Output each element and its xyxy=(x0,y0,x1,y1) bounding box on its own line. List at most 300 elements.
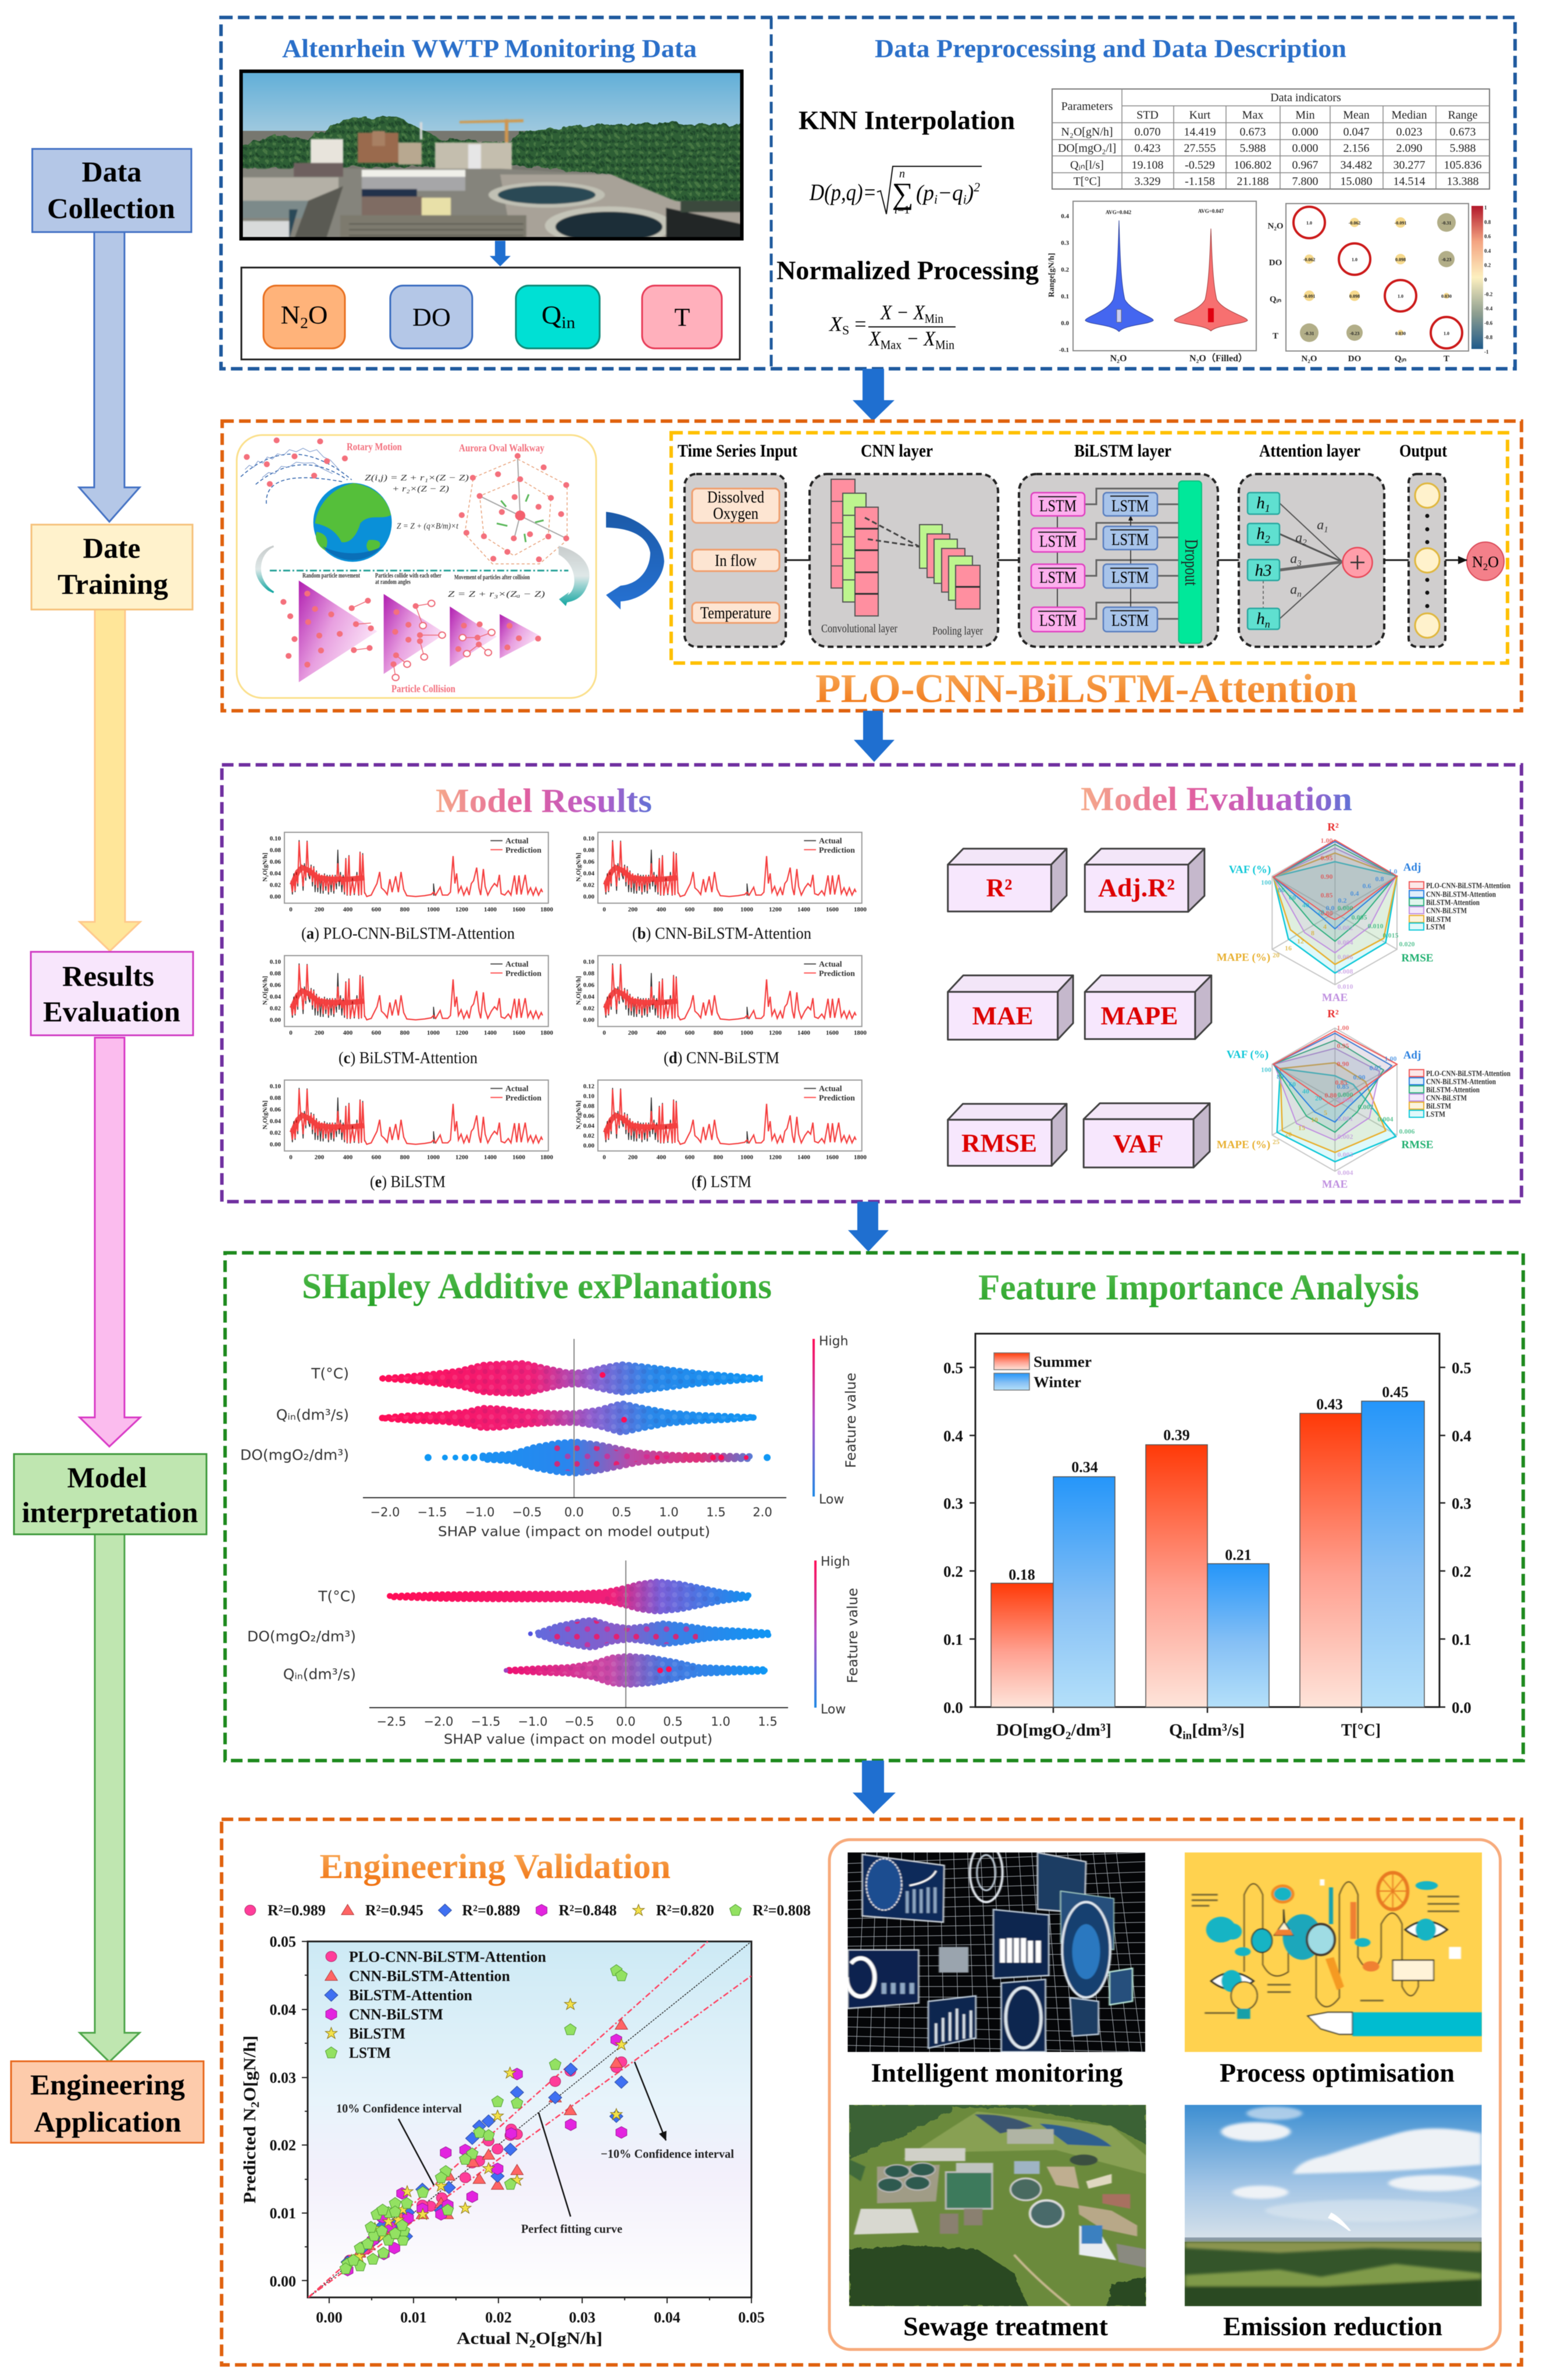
chart: PLO-CNN-BiLSTM-Attention: 0.02 xyxy=(270,882,281,889)
chart: CNN-BiLSTM-Attention: 1200 xyxy=(769,906,782,913)
chart: correlation heatmap: Qᵢₙ xyxy=(1270,295,1281,304)
panel: model interpretation xyxy=(225,1253,1523,1761)
chart: correlation heatmap: 0.8 xyxy=(1484,219,1491,225)
radar chart 2: 0.001 xyxy=(1338,1114,1353,1123)
formula: distance: n xyxy=(899,168,905,180)
SHAP chart: summer: 2.0 xyxy=(753,1505,772,1519)
chart: correlation heatmap: T xyxy=(1444,354,1449,364)
BiLSTM block: LSTM xyxy=(1039,497,1077,515)
table: data indicators: 2.156 xyxy=(1344,142,1369,155)
chart: BiLSTM: 1600 xyxy=(512,1154,526,1161)
chart: LSTM: 0.00 xyxy=(583,1142,594,1149)
formula: distance: ∑ xyxy=(892,177,914,211)
chart: correlation heatmap: 0.030 xyxy=(1441,294,1452,299)
attention block: h xyxy=(1256,610,1265,628)
x axis title: O[gN/h] xyxy=(536,2329,603,2348)
chart: LSTM: 0.04 xyxy=(583,1123,594,1130)
chart: correlation heatmap: -0.062 xyxy=(1349,220,1360,226)
labels of PLO diagram xyxy=(302,441,545,694)
annotations: Perfect fitting curve xyxy=(521,2222,622,2236)
table: data indicators: 105.836 xyxy=(1444,159,1482,172)
y axes labels: 0.3 xyxy=(943,1495,963,1512)
step: Results Evaluation: Results xyxy=(62,960,154,992)
swarm: Qin row xyxy=(509,1656,765,1685)
chart: BiLSTM: 1400 xyxy=(484,1154,497,1161)
formula: normalization: S xyxy=(842,323,849,337)
attention block: 3 xyxy=(1296,559,1302,568)
radar chart 1: R² xyxy=(1327,821,1339,833)
column headings: BiLSTM layer xyxy=(1074,440,1171,461)
step: Model interpretation xyxy=(14,1454,206,1534)
y axis title: O[gN/h] xyxy=(240,2036,259,2101)
radar chart 1: 0.000 xyxy=(1338,904,1353,912)
SHAP chart: summer: −0.5 xyxy=(512,1505,542,1519)
indicator: Qin xyxy=(516,286,600,348)
y axes labels xyxy=(943,1359,1471,1716)
output: N2O xyxy=(1467,542,1504,580)
radar chart 1: RMSE xyxy=(1402,952,1433,964)
axis tick labels xyxy=(270,1933,765,2326)
SHAP chart: summer: −1.0 xyxy=(465,1505,494,1519)
R-squared legend: R²=0.889 xyxy=(462,1902,520,1919)
formula: distance: i xyxy=(934,192,938,206)
formula: normalization: Min xyxy=(935,337,954,352)
radar chart 1: 0.005 xyxy=(1352,913,1367,921)
chart: CNN-BiLSTM: 600 xyxy=(685,1029,695,1036)
chart: violin plot: N₂O（Filled） xyxy=(1189,353,1248,364)
chart: correlation heatmap: -0.31 xyxy=(1442,220,1451,226)
chart: PLO-CNN-BiLSTM-Attention: 0.04 xyxy=(270,870,281,877)
chart: correlation heatmap: 0.6 xyxy=(1484,234,1491,240)
chart: PLO-CNN-BiLSTM-Attention: 1200 xyxy=(455,906,469,913)
caption a: (a) PLO-CNN-BiLSTM-Attention xyxy=(301,924,515,943)
SHAP chart: winter: −2.0 xyxy=(423,1715,454,1729)
step: Engineering Application: Engineering xyxy=(30,2068,185,2101)
caption c: (c) BiLSTM-Attention xyxy=(338,1049,477,1067)
y axes labels: 0.5 xyxy=(1452,1359,1471,1377)
image: sewage treatment xyxy=(849,2104,1147,2307)
step: Model interpretation: Model xyxy=(67,1461,147,1494)
icon: earth xyxy=(313,483,392,562)
chart: correlation heatmap: 0.098 xyxy=(1395,257,1406,262)
image: emission reduction xyxy=(1184,2104,1482,2307)
step: Date Training xyxy=(31,525,193,610)
chart: CNN-BiLSTM: 1200 xyxy=(769,1029,782,1036)
indicator: Qin: Q xyxy=(541,301,560,329)
indicator: N2O: N xyxy=(280,301,299,329)
radar chart 2: 0.95 xyxy=(1337,1042,1349,1050)
swarm dots xyxy=(387,1594,768,1673)
chart: violin plot: -0.1 xyxy=(1059,347,1069,354)
table: data indicators: 13.388 xyxy=(1447,175,1478,188)
chart: CNN-BiLSTM: 200 xyxy=(628,1029,638,1036)
indicator: T: T xyxy=(675,303,690,332)
chart: violin plot: Range[gN/h] xyxy=(1047,253,1056,297)
chart: CNN-BiLSTM-Attention: 800 xyxy=(714,906,724,913)
chart: PLO-CNN-BiLSTM-Attention: 800 xyxy=(400,906,410,913)
PLO optimiser diagram xyxy=(237,435,596,698)
application gallery xyxy=(829,1840,1501,2350)
radar chart 1: 0.85 xyxy=(1320,891,1333,899)
radar chart 1: 100 xyxy=(1261,878,1271,886)
chart: PLO-CNN-BiLSTM-Attention: 1000 xyxy=(427,906,440,913)
network box xyxy=(671,433,1508,663)
chart: correlation heatmap: T xyxy=(1273,332,1278,341)
category labels: [dm³/s] xyxy=(1192,1720,1245,1740)
table: data indicators: 0.023 xyxy=(1396,126,1423,138)
table: data indicators: 5.988 xyxy=(1240,142,1266,155)
table: data indicators: 14.514 xyxy=(1394,175,1425,188)
table: data indicators: 0.673 xyxy=(1240,126,1266,138)
R-squared legend: R²=0.808 xyxy=(753,1902,811,1919)
labels of PLO diagram: Z(i,j) = Z + r₁×(Z − Z) xyxy=(365,473,469,483)
panel: PLO-CNN-BiLSTM-Attention xyxy=(222,421,1521,711)
table: data indicators: Data indicators xyxy=(1270,91,1341,104)
scatter legend: CNN-BiLSTM xyxy=(349,2006,443,2023)
SHAP chart: winter xyxy=(247,1555,861,1747)
SHAP chart: summer xyxy=(240,1334,859,1540)
table: data indicators: 15.080 xyxy=(1340,175,1373,188)
chart: BiLSTM: Prediction xyxy=(505,1094,541,1103)
BiLSTM block xyxy=(1019,474,1218,647)
chart: CNN-BiLSTM-Attention: 600 xyxy=(685,906,695,913)
category labels xyxy=(996,1720,1381,1742)
radar chart 2: 40 xyxy=(1302,1087,1309,1095)
scatter legend: PLO-CNN-BiLSTM-Attention xyxy=(349,1948,547,1965)
radar chart 1: 4 xyxy=(1323,922,1327,931)
axis tick labels: 0.02 xyxy=(270,2137,296,2154)
table: data indicators: N₂O[gN/h] xyxy=(1061,126,1113,138)
axis tick labels: 0.01 xyxy=(400,2309,427,2326)
formula: normalization: X − X xyxy=(881,301,931,324)
BiLSTM block: LSTM xyxy=(1039,533,1077,551)
table: data indicators: 14.419 xyxy=(1184,126,1216,138)
table: data indicators: 30.277 xyxy=(1394,159,1425,172)
radar chart 2: 20 xyxy=(1285,1130,1292,1138)
formula: normalization: − X xyxy=(901,327,936,350)
caption b: (b) CNN-BiLSTM-Attention xyxy=(632,924,811,943)
chart: BiLSTM-Attention: 1200 xyxy=(455,1029,469,1036)
chart: LSTM: 1200 xyxy=(769,1154,782,1161)
radar chart 1: 16 xyxy=(1285,944,1292,952)
SHAP chart: summer: −2.0 xyxy=(370,1505,400,1519)
step: Engineering Application: Application xyxy=(34,2105,181,2138)
caption e: (e) BiLSTM xyxy=(370,1173,446,1191)
SHAP chart: summer: −1.5 xyxy=(418,1505,447,1519)
swarm: T row xyxy=(390,1581,749,1612)
SHAP chart: winter: −2.5 xyxy=(377,1715,406,1729)
chart: LSTM: Prediction xyxy=(819,1094,855,1103)
SHAP chart: winter: 1.0 xyxy=(711,1715,730,1729)
table: data indicators: Kurt xyxy=(1189,109,1211,122)
radar chart 1: 0.010 xyxy=(1368,922,1383,930)
table: data indicators: DO[mgO₂/l] xyxy=(1058,142,1116,155)
radar chart 2: 25 xyxy=(1273,1138,1280,1146)
heading: monitoring data: Altenrhein WWTP Monitoring Data xyxy=(282,34,697,63)
chart: correlation heatmap: -0.2 xyxy=(1484,291,1493,297)
chart: LSTM: 0.06 xyxy=(583,1113,594,1120)
chart: PLO-CNN-BiLSTM-Attention: 400 xyxy=(343,906,353,913)
step: Data Collection: Collection xyxy=(47,192,175,225)
R-squared legend: R²=0.820 xyxy=(656,1902,714,1919)
step: Results Evaluation: Evaluation xyxy=(43,995,180,1028)
radar chart 1: 0.010 xyxy=(1338,982,1353,991)
chart: CNN-BiLSTM-Attention: 0 xyxy=(603,906,606,913)
panel: data collection and preprocessing xyxy=(221,17,1515,369)
step: Results Evaluation xyxy=(31,952,193,1035)
chart: CNN-BiLSTM: 0.08 xyxy=(583,970,594,977)
table: data indicators: -1.158 xyxy=(1185,175,1215,188)
chart: LSTM: 0.02 xyxy=(583,1132,594,1139)
formula: normalization: Min xyxy=(925,311,943,326)
radar chart 1: 40 xyxy=(1302,901,1309,909)
formula: distance: ) xyxy=(965,181,974,205)
chart: CNN-BiLSTM: 0.04 xyxy=(583,993,594,1000)
chart: correlation heatmap: -0.23 xyxy=(1350,331,1359,336)
chart: BiLSTM-Attention: 1400 xyxy=(484,1029,497,1036)
step: Date Training: Date xyxy=(83,532,141,564)
zero line xyxy=(573,1339,575,1498)
chart: BiLSTM: 1000 xyxy=(427,1154,440,1161)
table: data indicators: 0.000 xyxy=(1292,142,1318,155)
chart: LSTM xyxy=(575,1080,867,1161)
chart: correlation heatmap: 0.030 xyxy=(1395,331,1406,336)
chart: LSTM: 1600 xyxy=(826,1154,839,1161)
SHAP chart: summer: 1.5 xyxy=(706,1505,726,1519)
chart: violin plot: 0.0 xyxy=(1061,320,1069,327)
chart: PLO-CNN-BiLSTM-Attention: 0.08 xyxy=(270,847,281,854)
chart: BiLSTM-Attention: Prediction xyxy=(505,970,541,978)
chart: PLO-CNN-BiLSTM-Attention: 600 xyxy=(372,906,382,913)
chart: BiLSTM-Attention xyxy=(262,956,554,1036)
axis tick labels: 0.05 xyxy=(270,1933,296,1950)
R-squared legend: R²=0.989 xyxy=(268,1902,326,1919)
bar value labels: 0.43 xyxy=(1316,1396,1343,1413)
chart: BiLSTM: 0.06 xyxy=(270,1106,281,1113)
chart: PLO-CNN-BiLSTM-Attention: N₂O[gN/h] xyxy=(262,853,269,882)
attention block: h xyxy=(1256,525,1265,543)
chart: CNN-BiLSTM-Attention: 0.02 xyxy=(583,882,594,889)
photo: Altenrhein WWTP xyxy=(240,70,743,245)
axis tick labels: 0.01 xyxy=(270,2205,296,2222)
chart: BiLSTM: 400 xyxy=(343,1154,353,1161)
input block: Temperature xyxy=(700,604,771,622)
radar chart 1: 0.95 xyxy=(1320,854,1333,862)
colour bar xyxy=(813,1339,815,1497)
category labels: in xyxy=(1182,1730,1192,1742)
axis tick labels: 0.03 xyxy=(270,2069,296,2086)
chart: BiLSTM: N₂O[gN/h] xyxy=(262,1100,269,1130)
chart: correlation heatmap: DO xyxy=(1269,258,1282,268)
metric boxes: MAE xyxy=(972,1002,1033,1030)
axis tick labels: 0.02 xyxy=(485,2309,512,2326)
chart: BiLSTM-Attention: 800 xyxy=(400,1029,410,1036)
chart: LSTM: 0 xyxy=(603,1154,606,1161)
output: N2O: O xyxy=(1488,553,1499,571)
chart: CNN-BiLSTM: 0 xyxy=(603,1029,606,1036)
metric boxes: RMSE xyxy=(961,1129,1037,1157)
table: data indicators: STD xyxy=(1136,109,1159,122)
radar legend 1: BiLSTM-Attention xyxy=(1426,899,1480,907)
aurora oval walkway xyxy=(465,459,567,564)
table: data indicators: 5.988 xyxy=(1449,142,1476,155)
chart: BiLSTM-Attention: 0.10 xyxy=(270,959,281,965)
chart: BiLSTM-Attention: Actual xyxy=(505,960,529,969)
chart: CNN-BiLSTM-Attention: Actual xyxy=(819,837,842,846)
annotations: 10% Confidence interval xyxy=(336,2101,462,2115)
caption: Emission reduction: Emission reduction xyxy=(1223,2311,1442,2341)
legend: seasons xyxy=(994,1353,1092,1391)
indicator: T xyxy=(642,286,722,348)
chart: correlation heatmap: 1.0 xyxy=(1306,220,1312,226)
chart: correlation heatmap: 0.2 xyxy=(1484,262,1491,268)
swarm: Qin row xyxy=(382,1403,755,1433)
table: data indicators: 19.108 xyxy=(1132,159,1163,172)
chart: violin plot: 0.3 xyxy=(1061,240,1069,247)
attention block: h3 xyxy=(1255,561,1271,580)
radar chart 1: 0.90 xyxy=(1320,872,1333,881)
caption: Intelligent monitoring: Intelligent monitoring xyxy=(871,2058,1122,2087)
SHAP chart: winter: T(°C) xyxy=(318,1588,356,1605)
chart: violin plot: 0.4 xyxy=(1061,213,1069,220)
chart: CNN-BiLSTM-Attention: 0.00 xyxy=(583,893,594,900)
chart: correlation heatmap: 0.4 xyxy=(1484,248,1491,254)
radar chart 2: 0.004 xyxy=(1338,1168,1353,1177)
radar chart 2: 0.003 xyxy=(1338,1150,1353,1159)
BiLSTM block: LSTM xyxy=(1039,569,1077,587)
legend: seasons: Winter xyxy=(1034,1374,1081,1391)
y axes labels: 0.3 xyxy=(1452,1495,1471,1512)
chart: BiLSTM: Actual xyxy=(505,1085,529,1093)
SHAP chart: winter: −1.5 xyxy=(471,1715,500,1729)
legend: seasons: Summer xyxy=(1034,1353,1092,1370)
input block: Oxygen xyxy=(713,505,758,523)
y axis title: Predicted N xyxy=(240,2115,259,2203)
chart: correlation heatmap: N₂O xyxy=(1268,222,1283,231)
chart: PLO-CNN-BiLSTM-Attention xyxy=(262,832,554,913)
image: process optimisation xyxy=(1184,1852,1483,2053)
labels of PLO diagram: + r₂×(Z − Z) xyxy=(392,484,449,494)
chart: BiLSTM-Attention: 0.08 xyxy=(270,970,281,977)
radar chart 1: 0.8 xyxy=(1375,875,1384,883)
formula: normalization: = xyxy=(849,312,867,336)
chart: correlation heatmap: DO xyxy=(1348,354,1361,364)
chart: CNN-BiLSTM: 1400 xyxy=(797,1029,811,1036)
radar chart 2: 0.002 xyxy=(1338,1132,1353,1141)
table: data indicators: Min xyxy=(1295,109,1315,122)
radar legend 1: LSTM xyxy=(1426,923,1445,932)
radar legend 1: PLO-CNN-BiLSTM-Attention xyxy=(1426,882,1510,890)
attention block: h xyxy=(1256,494,1265,512)
CNN block: Convolutional layer xyxy=(821,622,897,635)
chart: BiLSTM: 0.00 xyxy=(270,1141,281,1148)
SHAP chart: winter: 1.5 xyxy=(758,1715,778,1729)
curved arrow: right xyxy=(558,546,590,606)
scatter legend: CNN-BiLSTM-Attention xyxy=(349,1968,511,1984)
chart: correlation heatmap: -0.091 xyxy=(1395,220,1406,226)
labels of PLO diagram: Movement of particles after collision xyxy=(454,573,530,581)
radar legend 1: BiLSTM xyxy=(1426,915,1451,924)
y axis title: 2 xyxy=(249,2101,262,2108)
violin: N2O xyxy=(1085,220,1153,332)
formula: distance: D(p,q)= xyxy=(809,179,876,205)
attention block xyxy=(1239,474,1384,647)
radar chart 2: 0.85 xyxy=(1335,1078,1347,1086)
radar chart 2: 0.90 xyxy=(1337,1060,1349,1068)
chart: correlation heatmap: -0.6 xyxy=(1484,320,1493,326)
x axis title: 2 xyxy=(529,2338,536,2350)
chart: BiLSTM: 600 xyxy=(372,1154,382,1161)
BiLSTM block: LSTM xyxy=(1111,569,1149,587)
radar chart 2: R² xyxy=(1327,1008,1339,1020)
radar chart 2: 0.90 xyxy=(1353,1073,1366,1081)
chart: violin plot: 0.1 xyxy=(1061,293,1069,300)
radar legend 2: CNN-BiLSTM xyxy=(1426,1094,1467,1103)
x axis xyxy=(363,1497,786,1498)
indicator: N2O: 2 xyxy=(300,315,308,332)
chart: correlation heatmap: -0.23 xyxy=(1442,257,1451,262)
output: N2O: N xyxy=(1472,553,1483,571)
chart: BiLSTM-Attention: 400 xyxy=(343,1029,353,1036)
chart: BiLSTM: 0.04 xyxy=(270,1118,281,1125)
chart: CNN-BiLSTM-Attention: 0.08 xyxy=(583,847,594,854)
y axes labels: 0.5 xyxy=(943,1359,963,1377)
BiLSTM block: LSTM xyxy=(1111,531,1149,549)
attention block: 2 xyxy=(1265,533,1270,545)
radar chart 2: 0.004 xyxy=(1377,1115,1394,1123)
chart: CNN-BiLSTM-Attention: 0.10 xyxy=(583,835,594,842)
arrow: photo to indicators xyxy=(490,241,511,266)
chart: CNN-BiLSTM: 0.06 xyxy=(583,982,594,989)
bar chart: feature importance xyxy=(943,1334,1471,1742)
step: Date Training: Training xyxy=(58,568,168,600)
table: data indicators: 7.800 xyxy=(1292,175,1318,188)
attention block: n xyxy=(1297,590,1302,599)
labels of PLO diagram: Aurora Oval Walkway xyxy=(459,442,544,454)
annotation arrows xyxy=(398,2062,666,2217)
y axes labels: 0.0 xyxy=(943,1699,963,1716)
radar chart 2: 0.85 xyxy=(1337,1082,1349,1091)
radar chart 1: 20 xyxy=(1317,908,1324,916)
column headings xyxy=(678,440,1448,461)
chart: CNN-BiLSTM-Attention: 1600 xyxy=(826,906,839,913)
formula: normalization: X xyxy=(869,327,882,350)
chart: BiLSTM-Attention: 0 xyxy=(289,1029,293,1036)
chart: correlation heatmap: 1.0 xyxy=(1352,257,1357,262)
chart: LSTM: 1800 xyxy=(854,1154,867,1161)
metric boxes: MAPE xyxy=(1100,1002,1178,1030)
chart: CNN-BiLSTM: 1600 xyxy=(826,1029,839,1036)
SHAP chart: winter: 0.5 xyxy=(663,1715,683,1729)
table: data indicators: Qᵢₙ[l/s] xyxy=(1070,159,1104,172)
chart: PLO-CNN-BiLSTM-Attention: 1600 xyxy=(512,906,526,913)
chart: CNN-BiLSTM: Actual xyxy=(819,960,842,969)
bar value labels: 0.45 xyxy=(1382,1384,1409,1401)
radar chart 2: 0.006 xyxy=(1399,1127,1414,1135)
heading: Engineering Validation: Engineering Validation xyxy=(320,1847,671,1886)
table: data indicators: 34.482 xyxy=(1340,159,1373,172)
formula: distance: −q xyxy=(938,181,963,205)
chart: LSTM: 0.10 xyxy=(583,1093,594,1100)
caption: Process optimisation: Process optimisation xyxy=(1220,2058,1455,2087)
chart: BiLSTM: 0.10 xyxy=(270,1083,281,1090)
SHAP chart: winter: Low xyxy=(821,1702,846,1717)
radar chart 2: MAE xyxy=(1322,1178,1348,1191)
SHAP chart: summer: 0.5 xyxy=(612,1505,632,1519)
radar chart 1: 0.6 xyxy=(1362,882,1371,890)
axis tick labels: 0.03 xyxy=(569,2309,596,2326)
SHAP chart: winter: −0.5 xyxy=(564,1715,594,1729)
